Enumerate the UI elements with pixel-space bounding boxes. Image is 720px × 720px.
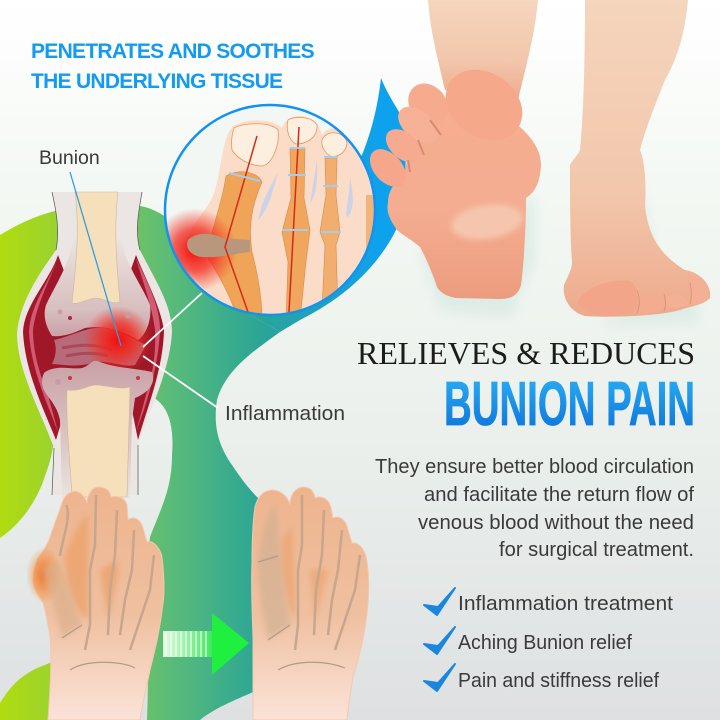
icon: raised foot showing sole — [363, 0, 541, 318]
item: pain and stiffness relief: Pain and stiffness relief — [458, 669, 659, 692]
heading: relieves and reduces: RELIEVES & REDUCES — [357, 335, 695, 371]
checklist — [424, 588, 673, 692]
heading: penetrates and soothes — [31, 40, 315, 93]
text block: description: They ensure better blood circulation — [375, 456, 694, 478]
icon: foot after treatment — [252, 487, 369, 720]
zoomed toe x-ray circle — [153, 105, 380, 320]
green wave background shape — [0, 78, 406, 720]
icon: standing foot and leg — [564, 0, 710, 326]
icon: foot before treatment — [26, 487, 164, 720]
arrow: before to after — [163, 613, 249, 675]
text block: description: and facilitate the return flow of — [424, 484, 694, 506]
text block: description: for surgical treatment. — [499, 539, 694, 561]
item: aching bunion relief: Aching Bunion relief — [458, 631, 632, 654]
item: inflammation treatment: Inflammation treatment — [458, 592, 673, 615]
joint diagram — [17, 192, 172, 498]
heading: penetrates and soothes: PENETRATES AND SOOTHES — [31, 40, 315, 63]
callout: pointer lines — [70, 172, 218, 408]
heading: penetrates and soothes: THE UNDERLYING TISSUE — [31, 70, 283, 93]
text block: description: venous blood without the need — [418, 512, 694, 534]
text block: description — [375, 456, 694, 561]
label: Bunion: Bunion — [39, 147, 100, 169]
item: pain and stiffness relief — [424, 664, 659, 692]
item: aching bunion relief — [424, 627, 632, 654]
label: Inflammation: Inflammation — [225, 402, 345, 425]
